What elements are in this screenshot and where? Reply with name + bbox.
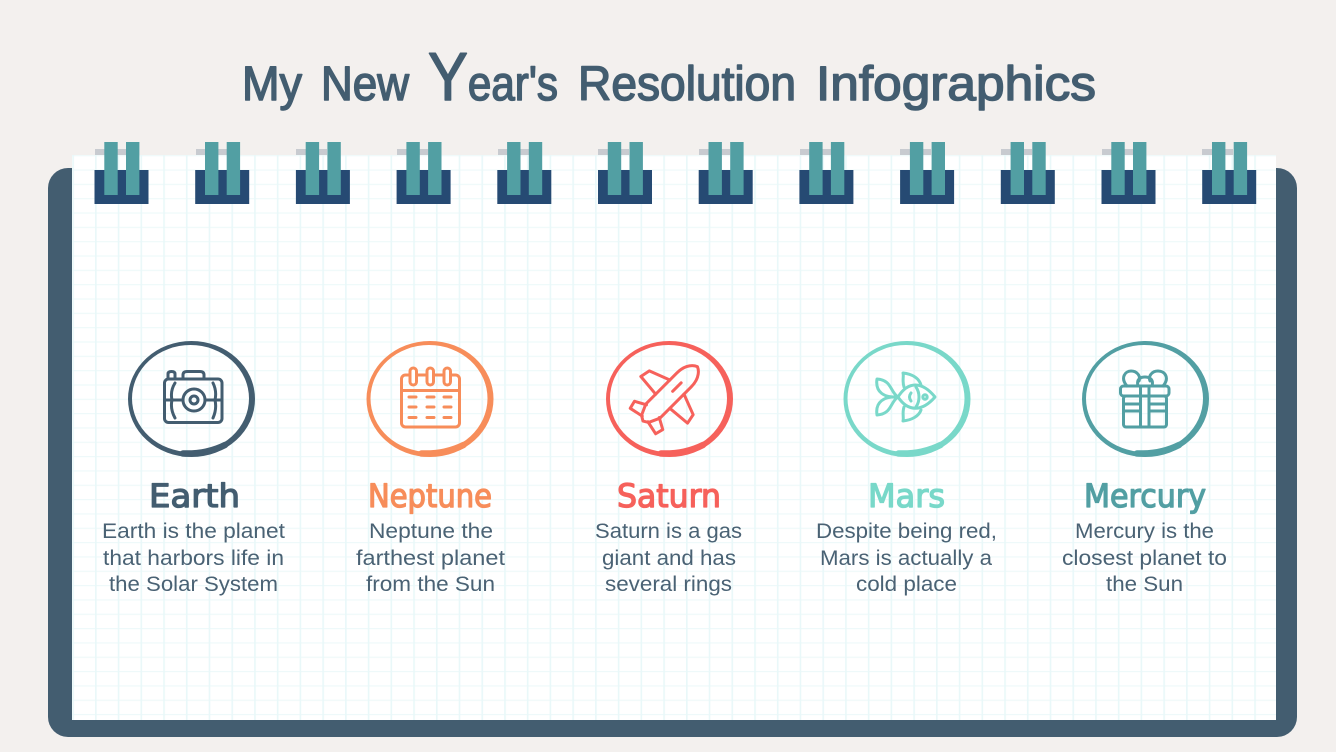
notebook backing (48, 168, 1297, 737)
ring: Mercury (1082, 341, 1209, 457)
title (242, 39, 1096, 115)
title: Year's (428, 39, 558, 115)
icon: airplane (620, 343, 721, 444)
description: Neptune: from the Sun (366, 572, 495, 596)
title: My (242, 58, 302, 111)
heading: Saturn: Saturn (617, 477, 721, 515)
heading: Neptune: Neptune (368, 477, 492, 515)
ring: Mars (844, 341, 970, 457)
description: Mercury: Mercury is the (1075, 519, 1214, 543)
description: Earth: that harbors life in (103, 546, 284, 570)
ring: Saturn (606, 341, 733, 457)
title: New (321, 58, 409, 111)
ring: Earth (128, 341, 255, 457)
description: Saturn: Saturn is a gas (595, 519, 742, 543)
description: Mercury: the Sun (1106, 572, 1183, 596)
column: Earth (102, 341, 285, 596)
title: Resolution (578, 58, 796, 111)
description: Saturn: giant and has (602, 546, 736, 570)
description: Earth (102, 519, 285, 596)
icon: gift (1120, 371, 1169, 427)
description: Mercury (1062, 519, 1227, 596)
icon: fish (877, 373, 935, 421)
description: Neptune: farthest planet (356, 546, 505, 570)
description: Saturn: several rings (605, 572, 732, 596)
description: Mars: cold place (856, 572, 957, 596)
icon: calendar (402, 368, 460, 427)
column: Mercury (1062, 341, 1227, 596)
description: Mercury: closest planet to (1062, 546, 1227, 570)
column: Mars (816, 341, 997, 596)
icon: camera (164, 372, 222, 422)
heading: Mars: Mars (868, 477, 945, 515)
ring: Neptune (366, 341, 494, 457)
description: Mars: Despite being red, (816, 519, 997, 543)
heading: Earth: Earth (149, 477, 240, 515)
notebook grid paper (72, 155, 1276, 720)
description: Saturn (595, 519, 742, 596)
column: Saturn (595, 341, 742, 596)
description: Mars (816, 519, 997, 596)
title: Infographics (816, 58, 1096, 111)
column: Neptune (356, 341, 505, 596)
spiral binder rings (94, 142, 1256, 204)
description: Earth: the Solar System (109, 572, 278, 596)
description: Neptune: Neptune the (369, 519, 493, 543)
heading: Mercury: Mercury (1084, 477, 1206, 515)
description: Neptune (356, 519, 505, 596)
description: Earth: Earth is the planet (102, 519, 285, 543)
description: Mars: Mars is actually a (820, 546, 992, 570)
